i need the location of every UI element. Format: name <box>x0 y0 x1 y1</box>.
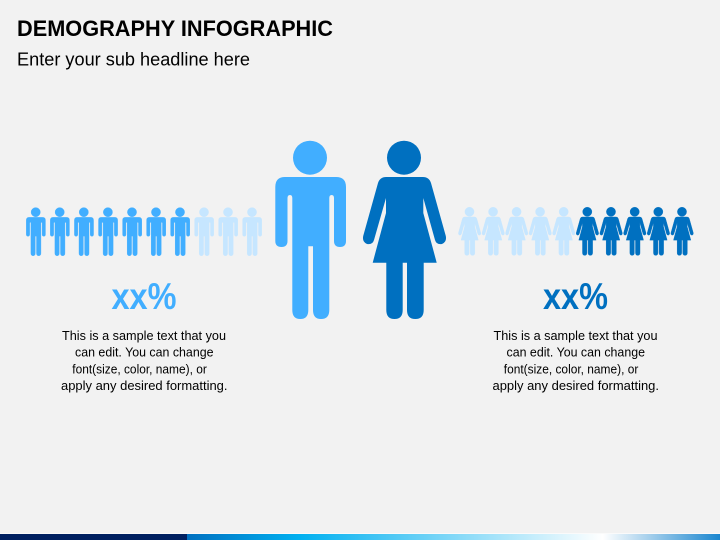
right description text: can edit. You can change <box>506 345 645 360</box>
footer bar <box>0 533 720 540</box>
left description text <box>61 328 228 393</box>
subtitle: Enter your sub headline here <box>17 50 250 70</box>
title: DEMOGRAPHY INFOGRAPHIC <box>17 16 333 41</box>
left percentage: xx% <box>112 276 176 317</box>
row of small men: 70% filled <box>26 208 262 256</box>
right description text: font(size, color, name), or <box>504 361 639 376</box>
row of small women: 50% filled <box>458 207 693 255</box>
right description text: This is a sample text that you <box>494 328 658 343</box>
right description text <box>492 328 659 393</box>
left description text: font(size, color, name), or <box>72 361 207 376</box>
left description text: can edit. You can change <box>75 345 214 360</box>
left description text: apply any desired formatting. <box>61 378 228 393</box>
right percentage: xx% <box>543 276 608 317</box>
left description text: This is a sample text that you <box>62 328 226 343</box>
large woman icon <box>363 141 446 319</box>
large man icon <box>275 141 346 319</box>
right description text: apply any desired formatting. <box>492 378 659 393</box>
